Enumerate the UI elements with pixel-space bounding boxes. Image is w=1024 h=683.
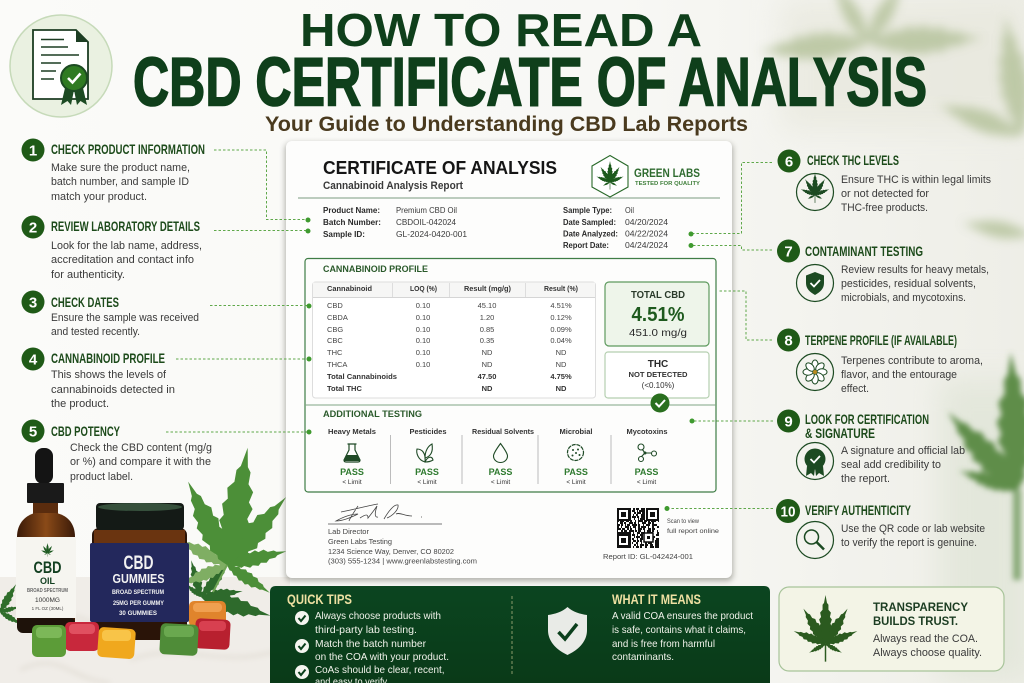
- signature block: Green Labs Testing: [328, 537, 392, 546]
- table: cannabinoid results: [312, 282, 596, 398]
- callout: THC not detected: NOT DETECTED: [628, 372, 688, 379]
- table: cannabinoid results: 0.10: [416, 348, 430, 357]
- table: cannabinoid results: 0.10: [416, 360, 430, 369]
- test: mycotoxins: < Limit: [637, 479, 656, 486]
- sample details: left: Product Name:: [323, 206, 380, 215]
- quick tips: QUICK TIPS: [287, 591, 352, 607]
- title: HOW TO READ A: [300, 4, 702, 56]
- step 10: VERIFY AUTHENTICITY: [805, 502, 911, 518]
- test: residual solvents: < Limit: [491, 479, 510, 486]
- quick tips: CoAs should be clear, recent,: [315, 664, 444, 676]
- signature block: 1234 Science Way, Denver, CO 80202: [328, 547, 454, 556]
- step 2: [22, 216, 202, 281]
- step 6: 6: [785, 154, 793, 170]
- table: cannabinoid results: Total THC: [327, 384, 362, 393]
- step 7: microbials, and mycotoxins.: [841, 292, 966, 304]
- step 7: 7: [784, 244, 793, 260]
- table: cannabinoid results: ND: [482, 360, 493, 369]
- QR caption: Report ID: GL-042424-001: [603, 552, 693, 561]
- certificate heading: CERTIFICATE OF ANALYSIS: [323, 158, 557, 178]
- jar label text: GUMMIES: [112, 571, 165, 586]
- step 10: to verify the report is genuine.: [841, 537, 977, 549]
- step 1: CHECK PRODUCT INFORMATION: [51, 141, 205, 157]
- table: cannabinoid results: Result (mg/g): [464, 284, 511, 293]
- test: microbial: Microbial: [560, 427, 592, 436]
- step 3: and tested recently.: [51, 326, 140, 338]
- step 1: Make sure the product name,: [51, 162, 190, 174]
- connectors: left steps: [166, 150, 312, 434]
- table: cannabinoid results: CBDA: [327, 313, 348, 322]
- blurred leaf: top right: [757, 0, 1024, 244]
- bottle label text: CBD: [34, 558, 62, 577]
- step 7: [777, 240, 989, 304]
- table: cannabinoid results: 0.09%: [550, 325, 572, 334]
- step 4: cannabinoids detected in: [51, 384, 175, 396]
- callout: total CBD: TOTAL CBD: [631, 290, 685, 301]
- callout: THC not detected: [605, 352, 709, 412]
- step 6: THC-free products.: [841, 202, 928, 214]
- jar label text: [112, 553, 165, 617]
- step 9: 9: [784, 414, 793, 430]
- step 5: 5: [29, 424, 37, 440]
- bottle label text: 1000MG: [35, 597, 60, 604]
- step 5: [22, 420, 212, 483]
- signature block: Lab Director: [328, 527, 369, 536]
- table: cannabinoid results: ND: [556, 360, 567, 369]
- step 4: CANNABINOID PROFILE: [51, 350, 165, 366]
- step 9: seal add credibility to: [841, 459, 941, 471]
- sample details: left: Batch Number:: [323, 218, 381, 227]
- heading: additional testing: ADDITIONAL TESTING: [323, 409, 422, 419]
- step 1: 1: [29, 142, 37, 160]
- product photo: marble table: [0, 577, 290, 683]
- panel: transparency builds trust: Always read the COA.: [873, 633, 978, 645]
- step 6: CHECK THC LEVELS: [807, 152, 899, 168]
- table: cannabinoid results: Total Cannabinoids: [327, 372, 397, 381]
- step 9: the report.: [841, 473, 890, 485]
- test: residual solvents: Residual Solvents: [472, 427, 534, 436]
- connectors: right steps: [664, 162, 773, 511]
- signature block: (303) 555-1234 | www.greenlabstesting.com: [328, 556, 477, 566]
- what it means: is safe, contains what it claims,: [612, 624, 746, 636]
- step 8: [777, 328, 983, 395]
- panel: transparency builds trust: BUILDS TRUST.: [873, 614, 958, 628]
- bottle label text: BROAD SPECTRUM: [27, 588, 68, 594]
- step 6: Ensure THC is within legal limits: [841, 174, 991, 186]
- test: microbial: [560, 427, 592, 486]
- test: mycotoxins: [626, 427, 668, 486]
- step 9: & SIGNATURE: [805, 425, 875, 441]
- blurred leaf: lower right: [938, 351, 1024, 580]
- what it means: WHAT IT MEANS: [612, 591, 701, 607]
- step 2: REVIEW LABORATORY DETAILS: [51, 218, 200, 234]
- step 6: [778, 150, 991, 214]
- callout: THC not detected: THC: [648, 359, 668, 370]
- QR caption: full report online: [667, 528, 719, 535]
- test: heavy metals: [328, 427, 376, 486]
- subtitle: Your Guide to Understanding CBD Lab Reports: [265, 113, 748, 136]
- step 5: Check the CBD content (mg/g: [70, 442, 212, 454]
- what it means: and is free from harmful: [612, 638, 715, 650]
- table: cannabinoid results: 4.75%: [550, 372, 572, 381]
- step 5: or %) and compare it with the: [70, 456, 211, 468]
- step 3: [22, 290, 199, 338]
- product: CBD oil bottle: [16, 448, 76, 633]
- jar label text: 25MG PER GUMMY: [113, 601, 164, 607]
- table: cannabinoid results: ND: [482, 384, 493, 393]
- table: cannabinoid results: CBG: [327, 325, 343, 334]
- panel: certificate card: [285, 141, 733, 581]
- table: cannabinoid results: 47.50: [478, 372, 496, 381]
- logo: Green Labs: GREEN LABS: [634, 166, 700, 180]
- title: [133, 4, 927, 120]
- step 7: CONTAMINANT TESTING: [805, 243, 923, 259]
- panel: transparency builds trust: TRANSPARENCY: [873, 600, 968, 614]
- step 7: Review results for heavy metals,: [841, 264, 989, 276]
- test: pesticides: < Limit: [417, 479, 437, 486]
- sample details: right: Date Sampled:: [563, 218, 616, 227]
- QR caption: [603, 518, 719, 561]
- logo: Green Labs: TESTED FOR QUALITY: [635, 181, 700, 187]
- panel: transparency builds trust: [779, 587, 1004, 671]
- callout: THC not detected: (<0.10%): [642, 381, 675, 390]
- quick tips: on the COA with your product.: [315, 651, 449, 663]
- certificate heading: [323, 158, 557, 192]
- step 5: CBD POTENCY: [51, 423, 120, 439]
- product: CBD gummies jar: [90, 503, 189, 640]
- table: cannabinoid results: 0.85: [480, 325, 494, 334]
- signature block: [328, 504, 477, 566]
- sample details: right: 04/20/2024: [625, 218, 669, 227]
- step 9: LOOK FOR CERTIFICATION: [805, 411, 929, 427]
- step 2: for authenticity.: [51, 269, 125, 281]
- test: mycotoxins: PASS: [635, 467, 658, 477]
- panel: quick tips and what it means: [270, 586, 770, 683]
- step 4: the product.: [51, 398, 109, 410]
- step 1: match your product.: [51, 191, 147, 203]
- logo: Green Labs: [592, 156, 700, 197]
- test: mycotoxins: Mycotoxins: [626, 427, 668, 436]
- step 10: 10: [780, 504, 796, 520]
- test: residual solvents: PASS: [489, 467, 512, 477]
- table: cannabinoid results: LOQ (%): [410, 284, 437, 293]
- sample details: left: Sample ID:: [323, 230, 365, 239]
- step 4: This shows the levels of: [51, 369, 167, 381]
- test: microbial: < Limit: [566, 479, 586, 486]
- icon: shield: [548, 607, 587, 655]
- what it means: A valid COA ensures the product: [612, 610, 753, 622]
- test: residual solvents: [472, 427, 534, 486]
- callout: total CBD: 4.51%: [632, 304, 685, 326]
- table: cannabinoid results: 45.10: [478, 301, 496, 310]
- what it means: contaminants.: [612, 651, 674, 663]
- table: cannabinoid results: 0.10: [416, 313, 430, 322]
- sample details: left: CBDOIL-042024: [396, 218, 457, 227]
- what it means: [612, 591, 753, 663]
- QR caption: Scan to view: [667, 518, 699, 525]
- step 8: effect.: [841, 383, 869, 395]
- bottle label text: 1 FL OZ (30ML): [32, 606, 64, 611]
- table: cannabinoid results: THCA: [327, 360, 347, 369]
- table: cannabinoid results: ND: [556, 384, 567, 393]
- bottle label text: OIL: [40, 576, 56, 586]
- sample details: right: [563, 206, 669, 250]
- jar label text: BROAD SPECTRUM: [112, 590, 164, 596]
- product photo: hemp leaves: [0, 445, 295, 627]
- step 3: 3: [29, 294, 37, 312]
- table: cannabinoid results: 0.04%: [550, 336, 572, 345]
- sample details: right: Oil: [625, 206, 634, 215]
- step 5: product label.: [70, 471, 133, 483]
- step 10: Use the QR code or lab website: [841, 523, 985, 535]
- table: cannabinoid results: 0.10: [416, 336, 430, 345]
- step 6: or not detected for: [841, 188, 929, 200]
- step 2: accreditation and contact info: [51, 254, 194, 266]
- step 4: 4: [29, 352, 38, 368]
- quick tips: [287, 591, 449, 683]
- test: heavy metals: Heavy Metals: [328, 427, 376, 436]
- table: cannabinoid results: 0.10: [416, 301, 430, 310]
- table: cannabinoid results: ND: [482, 348, 493, 357]
- sample details: left: GL-2024-0420-001: [396, 230, 468, 239]
- table: cannabinoid results: Cannabinoid: [327, 284, 372, 293]
- test: pesticides: [410, 427, 446, 486]
- table: cannabinoid results: 0.35: [480, 336, 494, 345]
- test: pesticides: Pesticides: [410, 427, 446, 436]
- quick tips: Always choose products with: [315, 610, 441, 622]
- jar label text: CBD: [124, 553, 154, 574]
- sample details: right: Report Date:: [563, 241, 609, 250]
- step 9: A signature and official lab: [841, 445, 965, 457]
- sample details: left: Premium CBD Oil: [396, 206, 457, 215]
- step 7: pesticides, residual solvents,: [841, 278, 976, 290]
- step 8: 8: [784, 332, 793, 350]
- sample details: right: 04/24/2024: [625, 241, 669, 250]
- table: cannabinoid results: 0.10: [416, 325, 430, 334]
- callout: total CBD: [605, 282, 709, 346]
- test: microbial: PASS: [564, 467, 588, 477]
- table: cannabinoid results: Result (%): [544, 284, 578, 293]
- quick tips: Match the batch number: [315, 638, 426, 650]
- table: cannabinoid results: CBC: [327, 336, 343, 345]
- panel: results frame: [305, 258, 716, 492]
- sample details: right: 04/22/2024: [625, 230, 669, 238]
- jar label text: 30 GUMMIES: [119, 611, 157, 617]
- step 1: [22, 138, 205, 203]
- test: pesticides: PASS: [415, 467, 439, 477]
- step 3: Ensure the sample was received: [51, 312, 199, 324]
- QR code: [617, 508, 659, 547]
- certificate heading: Cannabinoid Analysis Report: [323, 180, 463, 192]
- step 3: CHECK DATES: [51, 294, 119, 310]
- table: cannabinoid results: THC: [327, 348, 343, 357]
- step 9: [777, 410, 965, 485]
- table: cannabinoid results: ND: [556, 348, 567, 357]
- panel: transparency builds trust: Always choose quality.: [873, 647, 982, 659]
- table: cannabinoid results: 0.12%: [550, 313, 572, 322]
- quick tips: third-party lab testing.: [315, 624, 417, 636]
- table: cannabinoid results: 4.51%: [550, 301, 572, 310]
- header icon: certificate: [10, 15, 112, 117]
- step 8: Terpenes contribute to aroma,: [841, 355, 983, 367]
- callout: total CBD: 451.0 mg/g: [629, 327, 687, 339]
- step 10: [776, 499, 985, 558]
- sample details: right: Date Analyzed:: [563, 230, 618, 238]
- step 2: 2: [29, 220, 37, 236]
- step 2: Look for the lab name, address,: [51, 240, 202, 252]
- table: cannabinoid results: CBD: [327, 301, 343, 310]
- product: gummies: [32, 601, 231, 659]
- step 1: batch number, and sample ID: [51, 176, 189, 188]
- sample details: left: [323, 206, 468, 239]
- step 8: flavor, and the entourage: [841, 369, 957, 381]
- table: cannabinoid results: 1.20: [480, 313, 494, 322]
- sample details: right: Sample Type:: [563, 206, 612, 215]
- heading: cannabinoid profile: CANNABINOID PROFILE: [323, 264, 428, 274]
- bottle label text: [27, 543, 68, 611]
- step 4: [22, 348, 175, 410]
- icon: leaf: [792, 595, 859, 662]
- test: heavy metals: PASS: [340, 467, 364, 477]
- test: heavy metals: < Limit: [342, 479, 362, 486]
